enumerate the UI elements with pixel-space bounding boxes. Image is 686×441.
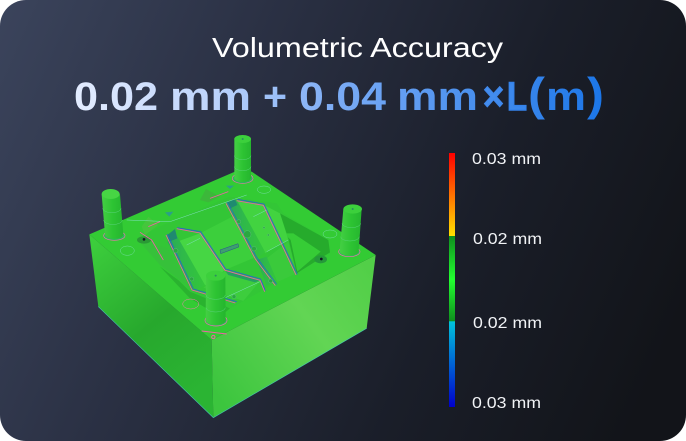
colour scale bar	[449, 153, 455, 407]
corner mark	[202, 331, 227, 339]
formula heading: 0.02	[74, 75, 158, 119]
blocks on the top bar	[142, 217, 158, 235]
formula heading: L	[507, 75, 527, 119]
title: Volumetric Accuracy	[212, 32, 503, 63]
boss with bolt hole	[137, 236, 151, 244]
pillar: front	[205, 271, 227, 326]
central label slot	[220, 244, 239, 254]
slanted bars	[167, 237, 205, 291]
scale labels: 0.02 mm	[473, 231, 542, 248]
plateaus	[200, 214, 257, 270]
scale labels: 0.03 mm	[472, 395, 541, 412]
right face	[212, 255, 376, 418]
top face	[89, 172, 376, 340]
formula heading: 0.04	[299, 75, 387, 119]
formula heading: mm	[170, 75, 251, 119]
pink and blue deviation lines	[127, 192, 297, 303]
formula heading: )	[587, 68, 604, 120]
scale labels: 0.02 mm	[473, 315, 542, 332]
formula heading: +	[263, 75, 287, 119]
pillar: right	[339, 204, 362, 257]
formula heading: mm	[397, 75, 478, 119]
3D mold deviation model	[89, 135, 376, 418]
cyan bottom edges	[98, 307, 367, 418]
scale labels: 0.03 mm	[472, 151, 541, 168]
pillar: back	[232, 135, 253, 183]
shadow beside the cavity	[160, 267, 230, 317]
formula heading: m	[546, 75, 586, 119]
left sloped wall	[137, 238, 192, 289]
formula heading	[74, 68, 604, 120]
formula heading: ×	[483, 75, 504, 119]
left face	[89, 234, 213, 418]
right window recess	[280, 213, 330, 273]
mold cavity	[127, 186, 330, 308]
screws in the plateau	[173, 220, 273, 299]
pad rings	[120, 186, 337, 309]
pillar: left	[102, 189, 125, 240]
formula heading: (	[528, 68, 546, 120]
scale labels	[472, 151, 542, 412]
